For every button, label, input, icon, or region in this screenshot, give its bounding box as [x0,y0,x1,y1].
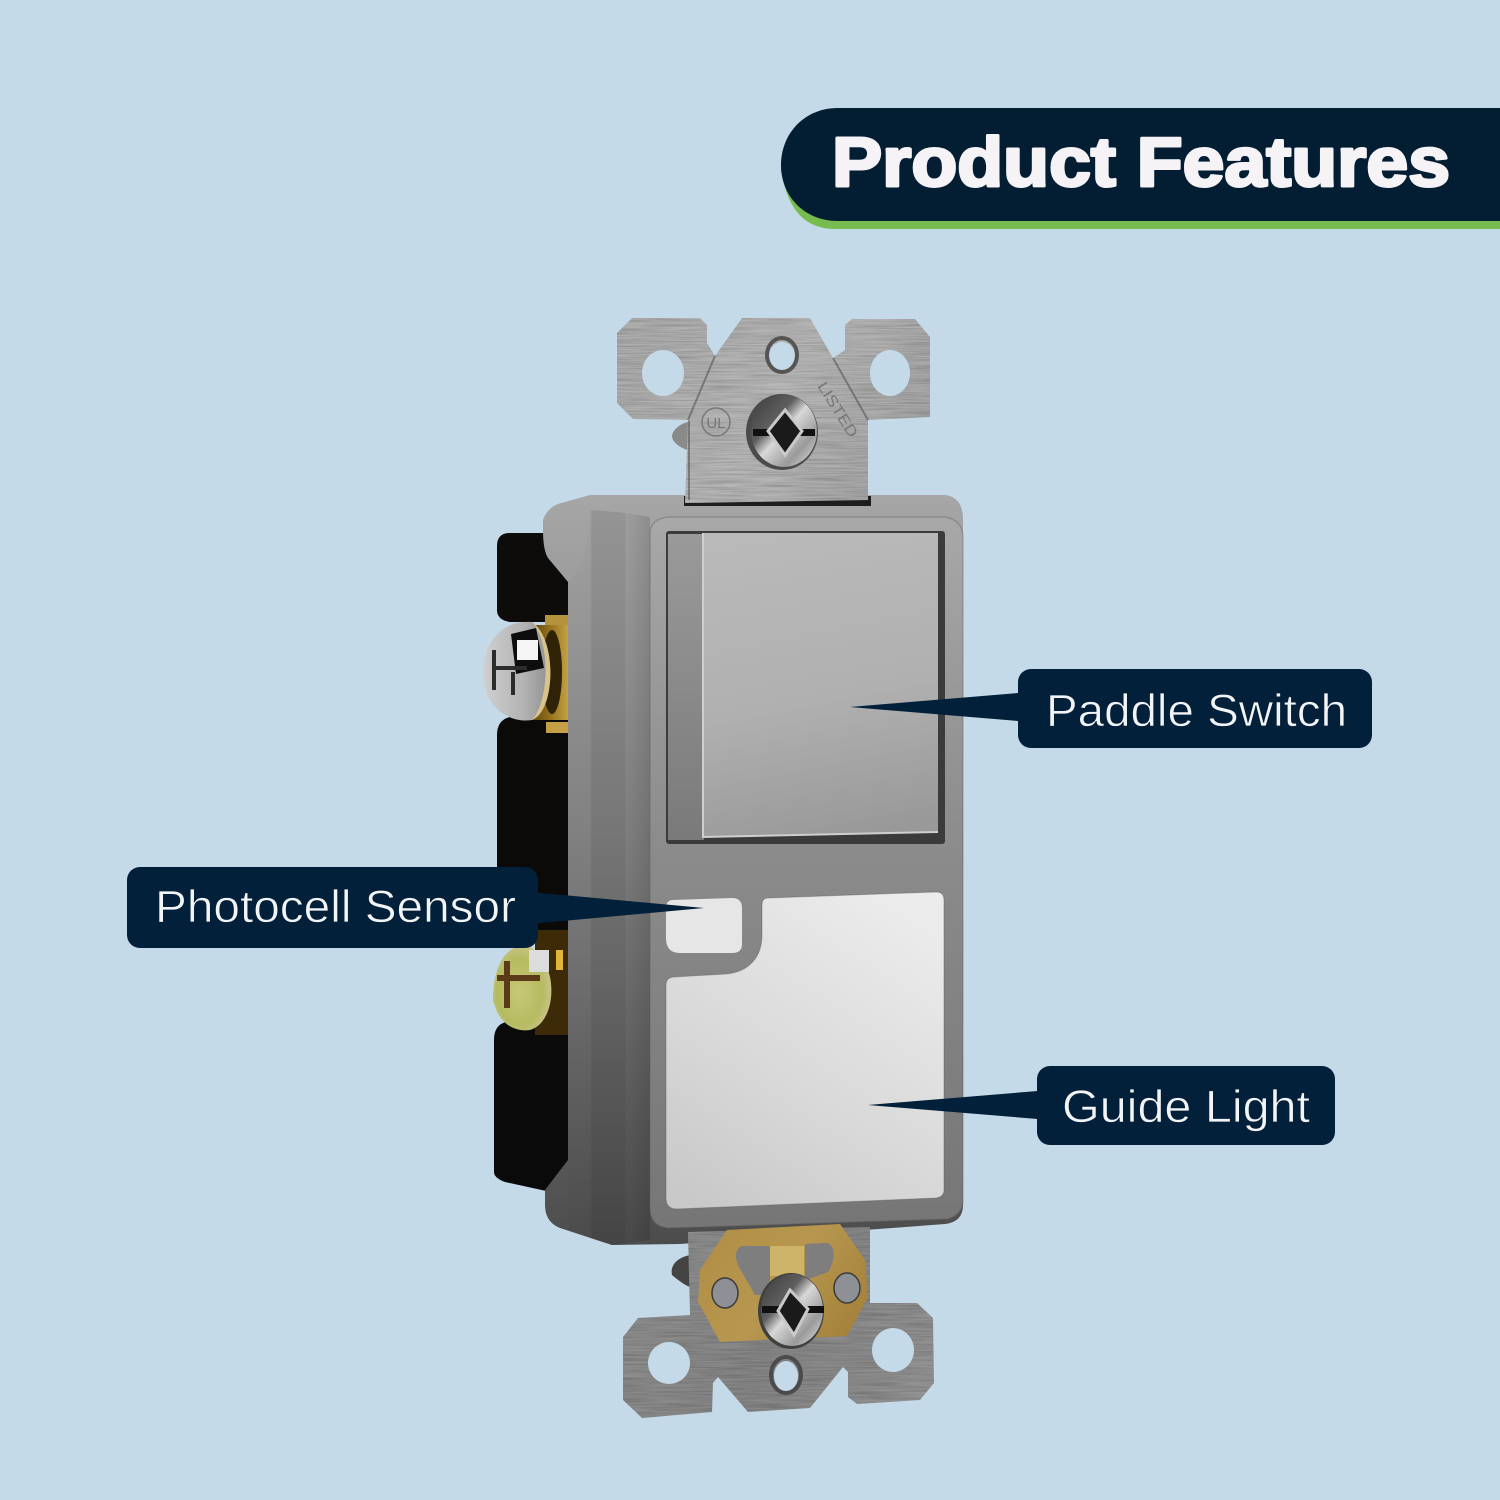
callout text: Guide Light [1062,1081,1311,1132]
UL mark: UL [706,415,726,432]
chrome side screw upper [483,622,550,720]
title banner [781,108,1500,229]
center hole ring [767,338,797,372]
guide light lens [666,892,944,1209]
slot openings [736,1243,834,1295]
bottom mounting screw [758,1273,824,1349]
title text: Product Features [832,123,1450,201]
zinc side screw lower [493,930,570,1035]
switch product illustration [483,318,963,1418]
brass terminal strap upper [530,615,570,733]
paddle switch [666,531,945,844]
callout: Paddle Switch [850,669,1372,748]
banner navy pill [781,108,1500,221]
photocell sensor window [666,898,742,953]
callout: Guide Light [868,1066,1335,1145]
callout text: Photocell Sensor [155,881,516,932]
top bracket slot [684,496,871,506]
callout text: Paddle Switch [1046,685,1347,736]
body side bevel shading [568,510,650,1245]
paddle left strip [668,534,704,840]
callout box [1037,1066,1335,1145]
right small screw [834,1273,860,1303]
lower center hole ring [771,1357,801,1393]
banner green underline [781,165,1500,229]
left small screw [712,1278,738,1308]
rear black housing [494,533,590,1194]
paddle edge highlight [703,533,938,837]
front plate [650,517,963,1228]
callout box [1018,669,1372,748]
bracket bend lines [688,356,868,500]
paddle recess [666,531,945,844]
LISTED stamp: LISTED [814,379,861,441]
brass tab [770,1246,804,1276]
body side and shell [543,495,963,1245]
top mounting bracket [617,318,930,503]
front plate rim highlight [650,517,963,1228]
callout box [127,867,538,948]
callout pointer [850,692,1030,722]
paddle face [703,533,938,837]
callout pointer [868,1090,1050,1120]
callout: Photocell Sensor [127,867,704,948]
brass ground plate [698,1224,868,1342]
small rear pin bottom [672,1255,692,1288]
callout pointer [530,892,704,924]
bottom mounting bracket [623,1224,934,1418]
top mounting screw [746,394,818,470]
UL mark [702,408,730,436]
small rear pin top [672,422,688,450]
